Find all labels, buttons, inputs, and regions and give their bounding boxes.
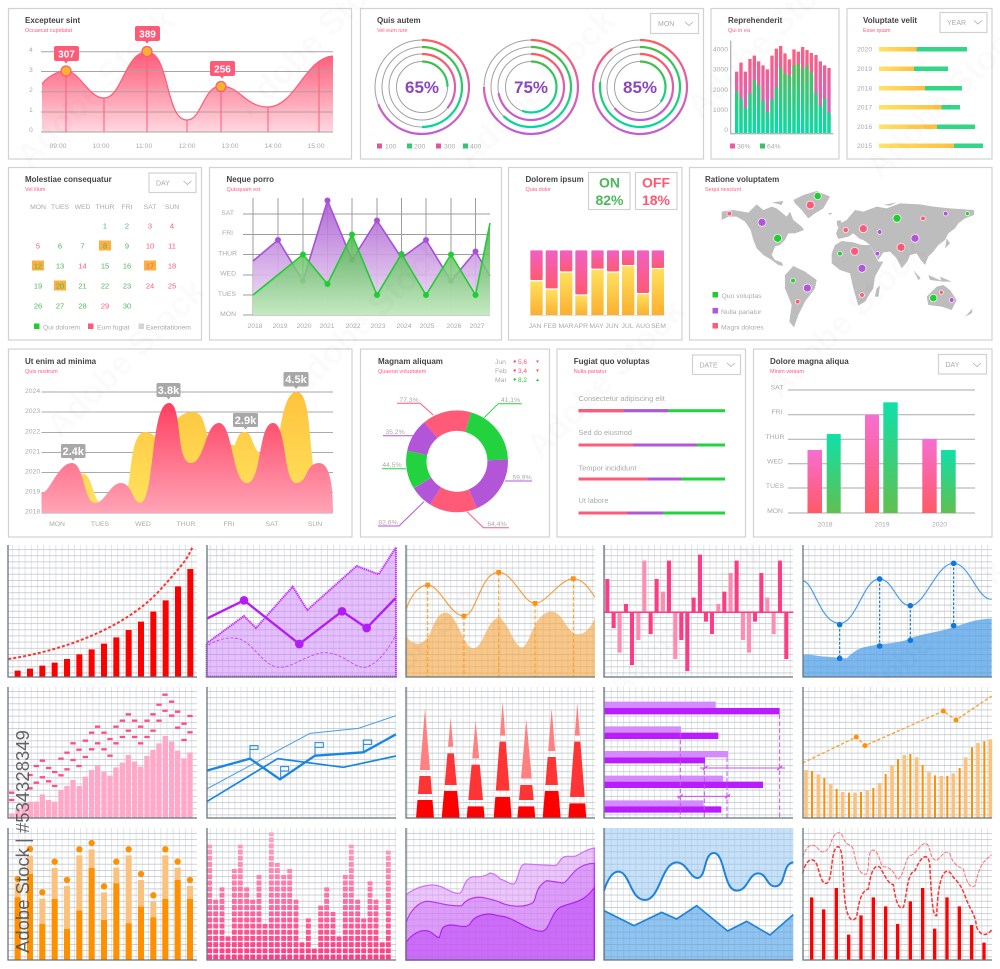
y labels: THUR xyxy=(218,250,237,258)
x axis labels: 12:00 xyxy=(178,143,196,150)
row labels: Ut labore xyxy=(578,496,608,505)
legend: 64% xyxy=(767,144,781,150)
panel: bar chart Dolore magna aliqua xyxy=(754,349,992,537)
panel: donut Magnam aliquam xyxy=(360,349,550,537)
y axis labels xyxy=(29,47,33,134)
x labels: 2019 xyxy=(272,323,288,330)
calendar days: 22 xyxy=(101,282,109,290)
y labels xyxy=(766,384,785,515)
donut labels xyxy=(378,397,532,528)
calendar days: 15 xyxy=(101,262,109,270)
calendar days: 16 xyxy=(123,262,131,270)
title: Fugiat quo voluptas xyxy=(574,357,650,366)
subtitle: Vel eum iure xyxy=(377,28,408,34)
month labels: JUL xyxy=(621,323,634,330)
x labels: 2026 xyxy=(446,323,462,330)
y labels: WED xyxy=(767,458,783,466)
legend: 200 xyxy=(414,144,426,150)
badge 2.4k: 2.4k xyxy=(62,446,85,458)
map legend: Nulla pariatur xyxy=(721,309,762,316)
weekday header: MON xyxy=(30,204,46,211)
y labels: TUES xyxy=(766,483,785,490)
y labels: THUR xyxy=(766,434,785,441)
legend: Exercitationem xyxy=(146,324,191,332)
bars xyxy=(731,41,833,134)
calendar days: 5 xyxy=(36,242,40,250)
weekday header: SUN xyxy=(165,204,179,211)
legend xyxy=(730,144,781,150)
marker 389 xyxy=(135,26,160,56)
chart: purple horizontal bars with dimension arrows xyxy=(604,687,793,818)
dropdown DAY xyxy=(149,173,196,192)
watermark: faint diagonal stamps: Adobe Stock xyxy=(519,292,693,466)
calendar days: 10 xyxy=(146,242,154,250)
panel: stacked bars Reprehenderit xyxy=(711,8,839,159)
x labels: 2024 xyxy=(396,323,412,330)
x labels: SAT xyxy=(266,521,278,528)
dropdown DAY: DAY xyxy=(156,180,170,188)
month labels: MAY xyxy=(589,323,604,330)
watermark: faint diagonal stamps: Adobe Stock xyxy=(279,232,453,406)
marker 256: 256 xyxy=(214,64,231,76)
x labels: TUES xyxy=(91,521,110,528)
chart: blue area with curve and dashed connectors xyxy=(803,545,992,677)
month labels: AUG xyxy=(636,323,650,330)
legend xyxy=(34,324,191,332)
dropdown YEAR xyxy=(940,12,987,32)
y labels: 2018 xyxy=(25,508,40,516)
chart: orange thin bars with dashed trend xyxy=(803,687,992,818)
watermark: faint diagonal stamps: Adobe Stock xyxy=(39,272,213,446)
donut chart xyxy=(400,404,514,519)
calendar days: 6 xyxy=(58,242,62,250)
subtitle: Vel illum xyxy=(25,187,46,193)
x labels: FRI xyxy=(224,521,235,528)
donut labels: 82,6% xyxy=(378,520,398,526)
x axis labels xyxy=(49,143,325,150)
badge 4.5k xyxy=(284,372,308,389)
x labels: 2025 xyxy=(419,323,435,330)
panel: line chart Excepteur sint xyxy=(8,8,352,159)
chart: orange area with line and dashed markers xyxy=(406,545,595,677)
legend: 300 xyxy=(444,144,456,150)
y labels: 2021 xyxy=(25,448,40,456)
x labels: 2027 xyxy=(469,323,485,330)
calendar days: 21 xyxy=(78,282,87,290)
subtitle: Quis nostrum xyxy=(25,369,58,375)
chart: red bars with dashed curves xyxy=(803,828,992,960)
map legend xyxy=(712,292,764,332)
chart: blue wave and zigzag area xyxy=(604,828,793,960)
calendar days: 3 xyxy=(148,222,152,230)
watermark: faint diagonal stamps: Adobe Stock xyxy=(69,532,243,706)
y labels xyxy=(25,388,40,516)
watermark: faint diagonal stamps: Adobe Stock xyxy=(759,232,933,406)
watermark: faint diagonal stamps: Adobe Stock xyxy=(449,2,623,176)
dropdown DATE xyxy=(692,355,740,374)
chart: red bars with dashed exponential curve xyxy=(8,545,197,677)
mini legend: Jun xyxy=(495,359,506,366)
title: Magnam aliquam xyxy=(378,357,443,366)
y axis labels: 3 xyxy=(29,67,33,74)
calendar days: 19 xyxy=(34,282,42,290)
row labels xyxy=(578,394,665,505)
calendar days: 11 xyxy=(168,242,176,250)
panel: area chart Neque porro xyxy=(210,168,502,340)
grid lines xyxy=(788,390,975,513)
calendar days: 17 xyxy=(146,262,154,270)
dropdown MON: MON xyxy=(658,21,674,28)
y labels: FRI xyxy=(222,230,233,237)
donut labels: 59,9% xyxy=(512,474,532,482)
subtitle: Esse quam xyxy=(863,28,891,34)
marker 307 xyxy=(54,46,79,76)
x labels: SUN xyxy=(308,521,322,528)
subtitle: Quisquam est xyxy=(226,187,261,193)
x labels xyxy=(247,323,485,330)
calendar days: 23 xyxy=(123,282,131,290)
legend: 36% xyxy=(737,144,751,150)
ring 65%: 65% xyxy=(405,78,439,97)
calendar days: 29 xyxy=(101,302,109,310)
watermark: faint diagonal stamps xyxy=(9,0,1000,726)
panel: horizontal bars Voluptate velit xyxy=(847,8,992,159)
y axis labels: 0 xyxy=(29,127,33,134)
x labels: 2021 xyxy=(319,323,335,330)
y axis labels: 1 xyxy=(29,107,33,114)
chart: purple layered areas xyxy=(406,828,595,960)
panel: progress lines Fugiat quo voluptas xyxy=(557,349,746,537)
y labels: 2019 xyxy=(25,488,40,496)
chart: red segmented cones xyxy=(406,687,595,818)
donut labels: 44,5% xyxy=(382,462,402,469)
chart: pink squares columns xyxy=(207,828,396,960)
weekday header: TUES xyxy=(51,204,70,211)
month labels: APR xyxy=(574,323,588,330)
row labels: Sed do eiusmod xyxy=(578,428,632,437)
title: Dolore magna aliqua xyxy=(770,357,849,366)
legend: Eum fugiat xyxy=(97,324,130,332)
dropdown DAY xyxy=(938,354,986,374)
OFF box xyxy=(636,172,677,210)
yellow wave xyxy=(75,392,316,513)
x labels: THUR xyxy=(177,521,196,528)
month labels: SEM xyxy=(651,323,666,330)
mini legend: 5,6 xyxy=(518,359,527,366)
weekday header: FRI xyxy=(122,204,133,211)
badge 3.8k xyxy=(156,383,180,400)
legend: Qui dolorem xyxy=(43,324,80,332)
title: Ut enim ad minima xyxy=(25,357,97,366)
calendar days: 7 xyxy=(80,242,85,250)
x labels: 2023 xyxy=(370,323,386,330)
calendar days: 9 xyxy=(125,242,129,250)
year labels: 2019 xyxy=(857,66,872,73)
green series xyxy=(253,223,490,315)
chart: blue lines with flags xyxy=(207,687,396,818)
y labels: SAT xyxy=(771,384,783,392)
calendar days: 12 xyxy=(34,262,42,270)
calendar days: 20 xyxy=(56,282,64,290)
title: Dolorem ipsum xyxy=(526,175,584,184)
calendar days: 27 xyxy=(56,302,64,310)
dropdown DAY: DAY xyxy=(946,362,960,369)
ring 65% xyxy=(375,40,469,134)
y axis labels: 0 xyxy=(724,127,728,134)
x labels xyxy=(49,521,322,528)
x axis labels: 13:00 xyxy=(221,143,239,150)
panel: wave chart Ut enim ad minima xyxy=(8,349,352,537)
subtitle: Sequi nesciunt xyxy=(705,187,742,193)
ring 85% xyxy=(593,40,687,134)
month labels: JUN xyxy=(605,323,619,330)
map legend: Quo voluptas xyxy=(722,293,762,300)
title: Quis autem xyxy=(377,16,421,25)
month labels: JAN xyxy=(529,323,542,330)
map legend: Magni dolores xyxy=(721,324,764,332)
y axis labels: 2 xyxy=(29,87,33,94)
calendar days: 25 xyxy=(168,282,176,290)
year labels xyxy=(857,46,872,150)
mini legend: Feb xyxy=(495,368,507,375)
calendar days: 28 xyxy=(78,302,87,310)
subtitle: Occaecat cupidatat xyxy=(25,28,73,34)
y labels: 2023 xyxy=(25,408,40,415)
panel: progress rings Quis autem xyxy=(360,8,704,159)
bars xyxy=(808,402,956,513)
calendar days: 18 xyxy=(168,262,176,270)
donut labels: 35,2% xyxy=(385,429,405,436)
ring 85%: 85% xyxy=(623,78,657,97)
y labels: MON xyxy=(220,311,236,318)
OFF box: 18% xyxy=(642,192,671,208)
x labels: WED xyxy=(135,521,151,528)
legend xyxy=(377,144,482,150)
year labels: 2016 xyxy=(857,124,872,131)
donut labels: 64,4% xyxy=(487,521,507,528)
panel: calendar Molestiae consequatur xyxy=(8,168,202,340)
panel: stacked columns Dolorem ipsum xyxy=(508,168,682,340)
mini legend: 3,4 xyxy=(518,368,527,375)
year labels: 2018 xyxy=(857,86,872,92)
y axis labels: 2000 xyxy=(713,87,728,94)
progress bars xyxy=(578,409,725,514)
subtitle: Nulla pariatur xyxy=(574,369,607,375)
mini legend: 8,2 xyxy=(518,377,527,384)
calendar days: 2 xyxy=(125,222,129,230)
subtitle: Quia dolor xyxy=(526,187,551,193)
calendar days: 30 xyxy=(123,302,131,310)
y labels: FRI xyxy=(772,409,783,416)
x axis labels: 14:00 xyxy=(264,143,282,150)
row labels: Consectetur adipiscing elit xyxy=(578,394,665,403)
map dots xyxy=(727,192,969,304)
x labels: 2020 xyxy=(932,522,947,528)
map continents xyxy=(722,191,974,327)
watermark: faint diagonal stamps: Adobe Stock xyxy=(9,2,183,176)
title: Molestiae consequatur xyxy=(25,175,112,184)
title: Voluptate velit xyxy=(863,16,917,25)
watermark: faint diagonal stamps: Adobe Stock xyxy=(339,552,513,726)
month labels: FEB xyxy=(543,323,557,330)
watermark: faint diagonal stamps: Adobe Stock xyxy=(599,532,773,706)
dropdown MON xyxy=(650,14,698,34)
calendar days: 8 xyxy=(103,242,107,250)
red wave xyxy=(42,403,333,513)
donut leaders xyxy=(378,403,532,528)
x axis labels: 15:00 xyxy=(307,143,325,150)
chart: pink diverging bars xyxy=(604,545,793,677)
marker 389: 389 xyxy=(139,30,156,40)
ON box xyxy=(588,172,630,210)
y labels: TUES xyxy=(218,291,236,298)
ON box: 82% xyxy=(595,192,624,208)
badge 4.5k: 4.5k xyxy=(285,374,308,386)
OFF box: OFF xyxy=(642,174,670,190)
bars xyxy=(879,47,983,148)
title: Ratione voluptatem xyxy=(705,175,779,184)
badge 2.9k: 2.9k xyxy=(235,415,257,427)
month labels: MAR xyxy=(558,323,574,330)
y axis labels: 4 xyxy=(29,47,33,54)
weekday header xyxy=(30,204,179,211)
calendar days: 14 xyxy=(78,262,87,270)
watermark: stock id along left edge: Adobe Stock | #534328349 xyxy=(12,730,33,953)
y axis labels: 1000 xyxy=(713,107,728,114)
mini legend: Mar xyxy=(495,377,507,384)
y labels: MON xyxy=(767,508,783,515)
y axis labels: 3000 xyxy=(713,66,728,74)
legend: 400 xyxy=(470,144,482,150)
x labels xyxy=(817,522,947,528)
x labels: 2019 xyxy=(874,522,890,528)
title: Excepteur sint xyxy=(25,16,80,25)
subtitle: Qui in ea xyxy=(728,28,751,34)
weekday header: THUR xyxy=(96,204,115,211)
subtitle: Minim veniam xyxy=(770,369,804,375)
badge 2.4k xyxy=(61,444,86,460)
y axis labels xyxy=(713,46,728,134)
marker 307: 307 xyxy=(58,50,75,60)
month labels xyxy=(529,323,666,330)
legend: 100 xyxy=(385,144,397,150)
dropdown DATE: DATE xyxy=(700,362,718,370)
year labels: 2017 xyxy=(857,104,872,112)
y labels: 2022 xyxy=(25,428,40,436)
x labels: 2020 xyxy=(296,323,312,330)
donut labels: 41,1% xyxy=(501,397,520,404)
chart: orange bars with dots xyxy=(8,828,197,960)
calendar days: 13 xyxy=(56,262,64,270)
x axis labels: 11:00 xyxy=(136,143,152,150)
y labels: SAT xyxy=(221,210,234,217)
row labels: Tempor incididunt xyxy=(578,464,636,472)
badge 3.8k: 3.8k xyxy=(158,385,180,397)
y labels: 2020 xyxy=(25,468,40,476)
highlighted days xyxy=(32,240,156,290)
x axis labels: 09:00 xyxy=(49,143,67,150)
x labels: MON xyxy=(49,521,65,528)
x labels: 2022 xyxy=(345,323,361,330)
calendar days: 4 xyxy=(170,222,174,230)
title: Reprehenderit xyxy=(728,16,783,25)
ring 75%: 75% xyxy=(514,78,548,97)
calendar days: 1 xyxy=(103,222,107,230)
area chart xyxy=(41,52,333,132)
y axis labels: 4000 xyxy=(713,46,728,54)
x labels: 2018 xyxy=(247,323,263,330)
x labels: 2018 xyxy=(817,522,833,528)
calendar days: 26 xyxy=(34,302,42,310)
y labels: WED xyxy=(220,270,236,278)
donut labels: 77,3% xyxy=(399,397,419,404)
ring 75% xyxy=(484,40,578,134)
calendar days: 24 xyxy=(146,282,154,290)
purple series xyxy=(253,198,490,315)
year labels: 2015 xyxy=(857,143,872,150)
chart grid xyxy=(243,198,490,315)
title: Neque porro xyxy=(226,175,274,184)
marker 256 xyxy=(210,61,235,92)
weekday header: SAT xyxy=(144,204,156,211)
mini legend xyxy=(495,359,539,384)
year labels: 2020 xyxy=(857,46,872,54)
badge 2.9k xyxy=(233,413,258,430)
chart: pink bars with floating dashes xyxy=(8,687,197,818)
dropdown YEAR: YEAR xyxy=(947,20,966,27)
x axis labels: 10:00 xyxy=(92,143,110,150)
y labels: 2024 xyxy=(25,388,40,395)
stacked columns xyxy=(529,250,665,315)
subtitle: Quaerat voluptatem xyxy=(378,369,427,375)
calendar days xyxy=(34,222,176,310)
ON box: ON xyxy=(599,174,620,190)
grid lines xyxy=(42,392,333,513)
y labels xyxy=(218,210,237,318)
chart: purple area with thick line xyxy=(207,545,396,677)
weekday header: WED xyxy=(75,204,91,211)
panel: world map Ratione voluptatem xyxy=(690,168,992,340)
